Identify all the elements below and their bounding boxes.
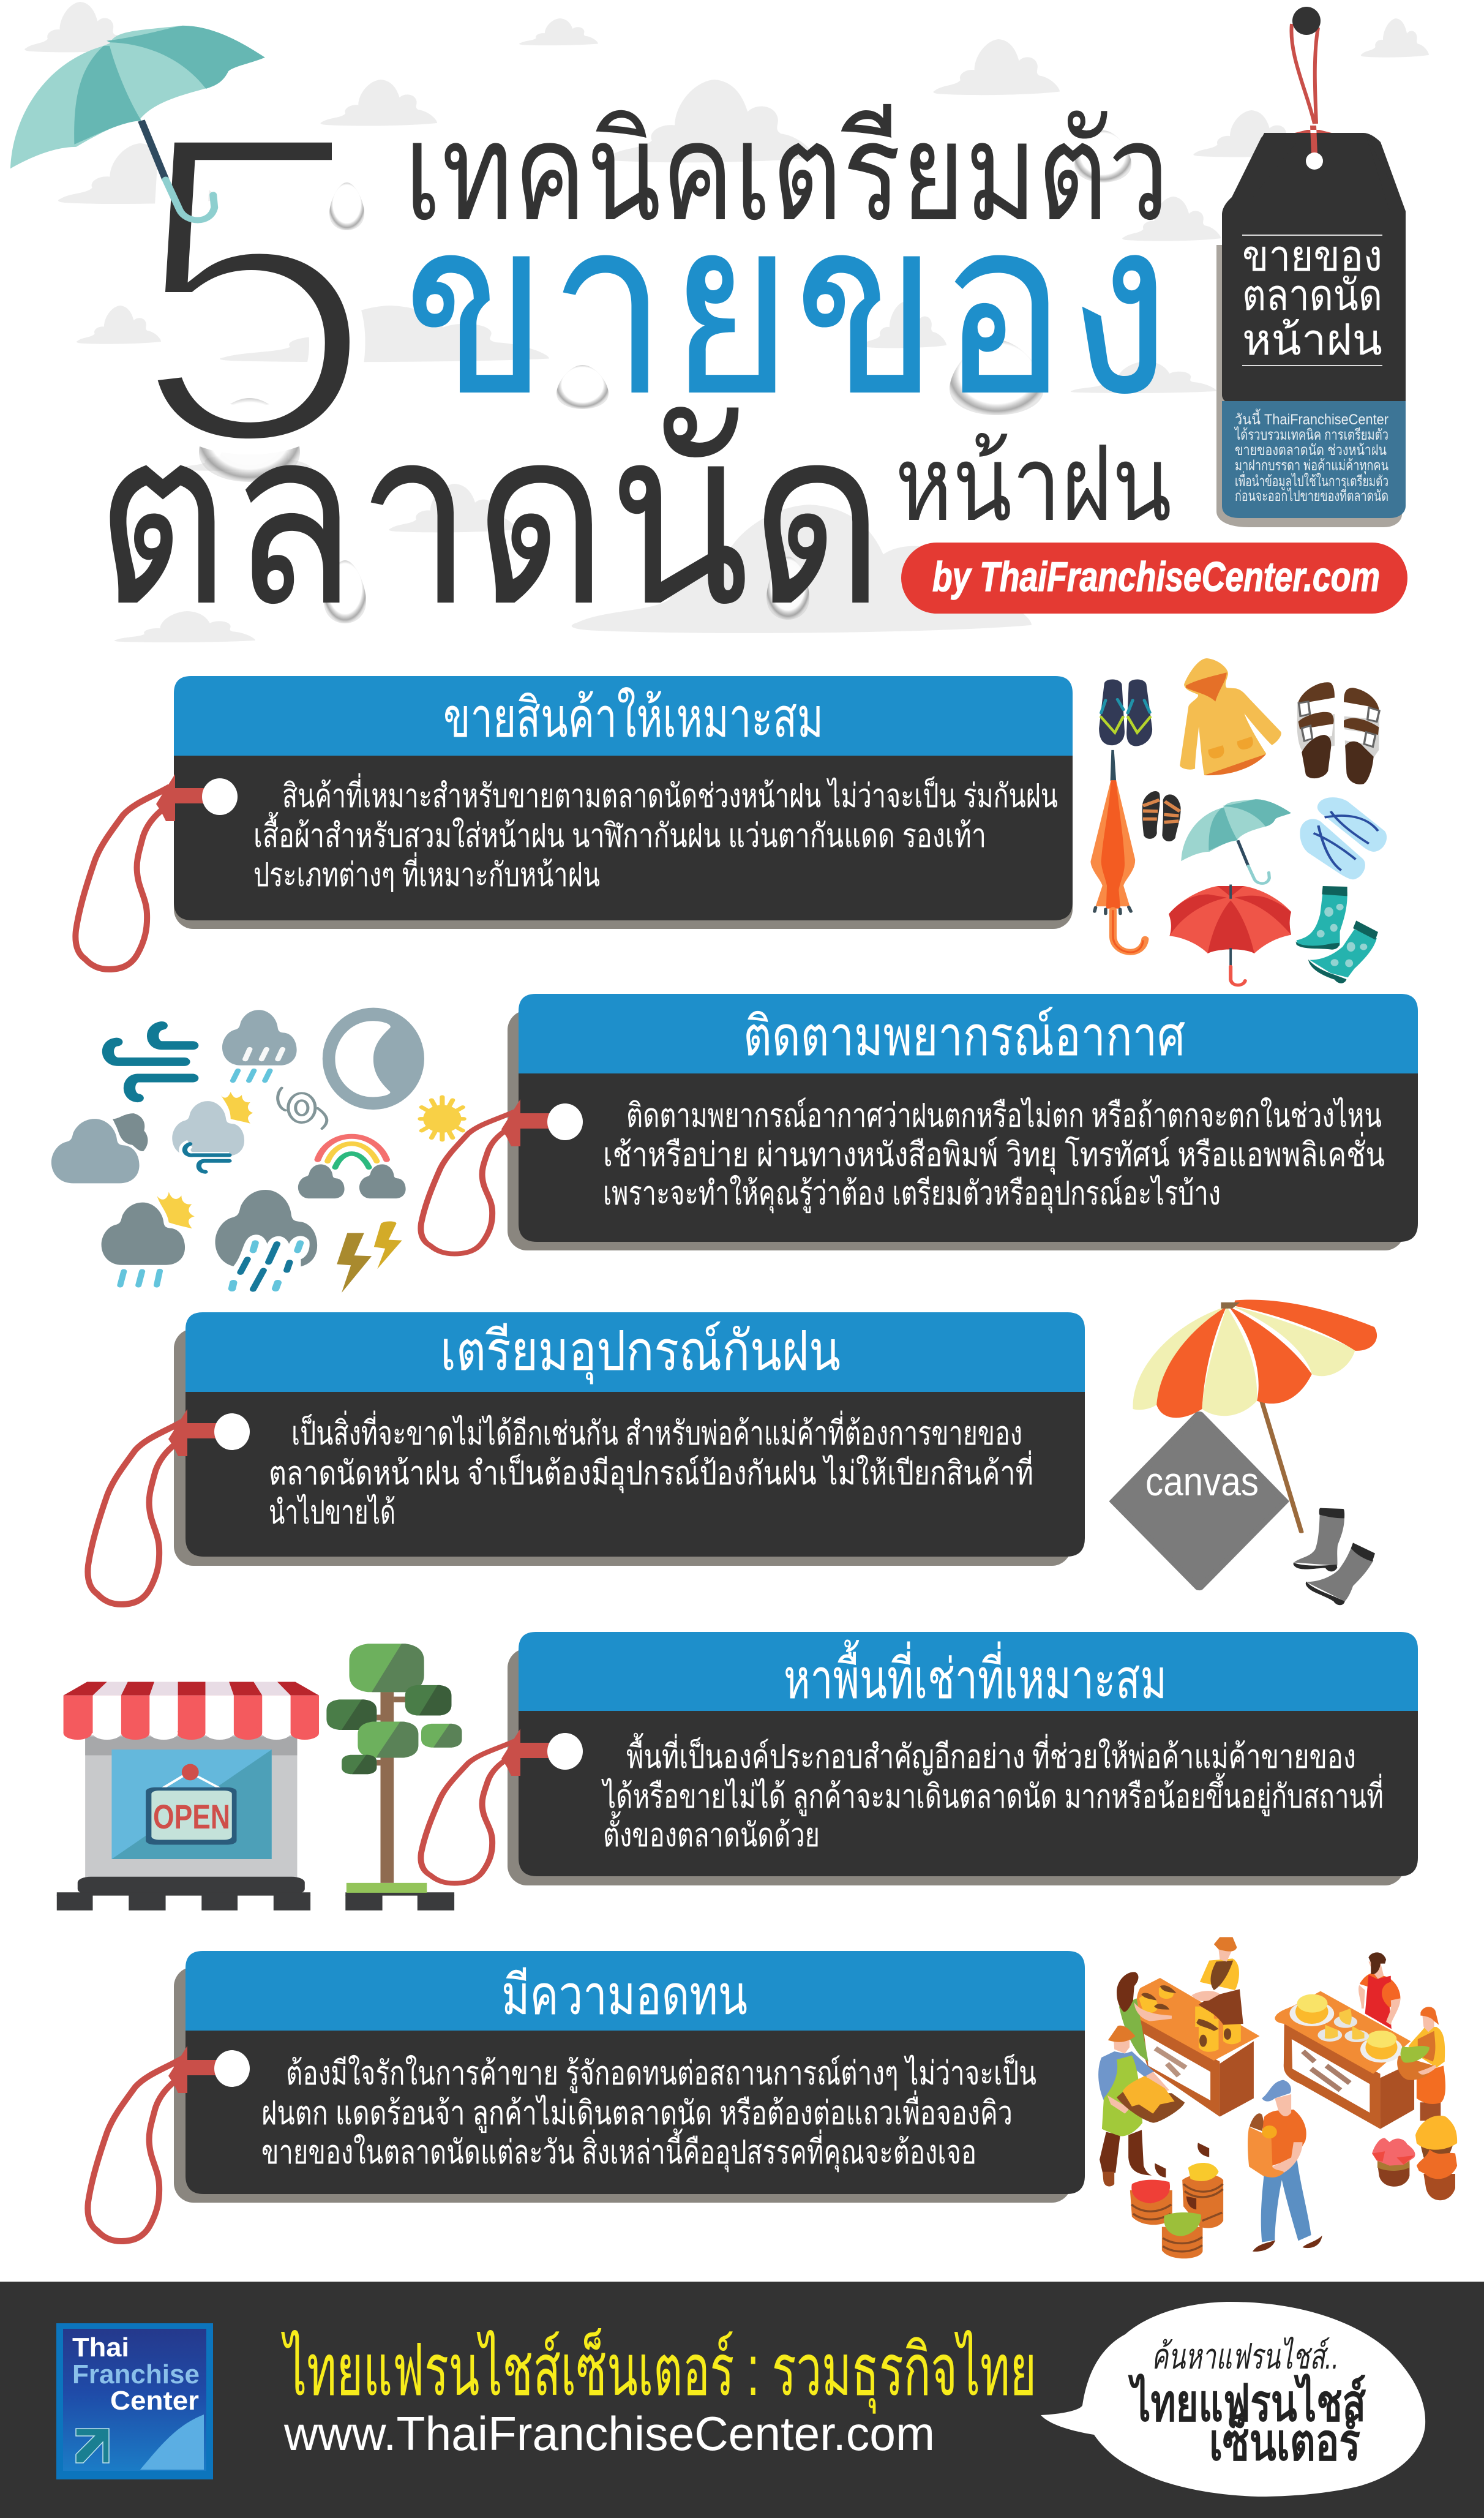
logo wing [140,2415,204,2470]
logo background [63,2329,206,2471]
card shadow [174,1967,1071,2203]
tag pin [1292,7,1321,35]
card text: ขายของในตลาดนัดแต่ละวัน สิ่งเหล่านี้คืออุปสรรคที่คุณจะต้องเจอ [261,2129,976,2173]
bubble shape [1041,2302,1425,2497]
icon: apple and pear barrels [1130,2143,1223,2258]
icon: yellow raincoat [1180,658,1281,775]
icon: striped awning [64,1682,319,1740]
icon: lightning [337,1221,402,1293]
icons: rainy season goods [1090,658,1387,985]
icon: wind [108,1026,193,1098]
tag loop [421,1729,583,1884]
icon: left stall [1136,1978,1259,2117]
icon: flower baskets [1372,2116,1457,2200]
card title: เตรียมอุปกรณ์กันฝน [440,1321,841,1385]
tag loop [75,774,238,969]
icon: man in red apron [1358,1952,1400,2029]
card text [603,1097,1385,1214]
open sign text: OPEN [153,1797,230,1836]
tag blue lower panel [1222,401,1406,518]
card text [261,2054,1036,2173]
icon: blue flip flops [1300,797,1387,879]
logo text [72,2332,200,2416]
icon: right stall [1275,1991,1414,2129]
red pill [901,543,1407,614]
card text: ประเภทต่างๆ ที่เหมาะกับหน้าฝน [253,852,600,893]
logo arrow [76,2429,109,2463]
footer headline: ไทยแฟรนไชส์เซ็นเตอร์ : รวมธุรกิจไทย [281,2328,1036,2415]
icons: weather [51,1008,464,1293]
illustration: market stalls and people [1098,1937,1457,2258]
tag text heading: หน้าฝน [1242,316,1382,364]
card body [186,1392,1085,1557]
icon: crescent moon [323,1008,424,1110]
number 5: 5 [130,37,376,537]
icon: canvas diamond [1113,1413,1285,1588]
panel: card 2 [421,994,1418,1254]
card title: หาพื้นที่เช่าที่เหมาะสม [784,1640,1167,1710]
card text: ฝนตก แดดร้อนจ้า ลูกค้าไม่เดินตลาดนัด หรือต้องต่อแถวเพื่อจองคิว [261,2090,1013,2133]
tag small paragraph [1234,408,1388,505]
speech bubble [1041,2302,1425,2497]
icon: sun behind rain cloud [102,1192,195,1285]
tag small paragraph: วันนี้ ThaiFranchiseCenter [1235,408,1388,428]
card text: สินค้าที่เหมาะสำหรับขายตามตลาดนัดช่วงหน้าฝน ไม่ว่าจะเป็น ร่มกันฝน [282,773,1058,814]
panel: card 3 [88,1312,1085,1604]
logo text: Center [110,2386,199,2416]
card text [601,1733,1384,1854]
icon: sun behind light cloud with wind [172,1092,253,1172]
card title: ติดตามพยากรณ์อากาศ [743,1006,1185,1067]
illustration: canvas, beach umbrella and boots [1113,1299,1377,1605]
icon: small black sandals [1142,791,1181,841]
title line 2: ขายของ [403,171,1171,445]
panel: card 5 [88,1951,1085,2241]
icon: brown sandals [1297,682,1379,784]
card header [174,676,1073,756]
bubble bold text [1128,2373,1366,2471]
icon: tree [326,1644,462,1893]
bubble bold text: เซ็นเตอร์ [1209,2411,1360,2471]
card header [519,994,1418,1073]
icon: storm cloud [215,1190,317,1290]
tag shadow [1216,245,1402,527]
icon: woman with basket [1397,2007,1445,2121]
icon: rainbow [298,1137,406,1198]
card shadow [174,735,1073,929]
icon: teal umbrella [1181,799,1291,884]
card body [519,1711,1418,1876]
card body [174,756,1073,920]
card shadow [508,1648,1404,1885]
tag text heading: ตลาดนัด [1242,271,1382,319]
card text: ต้องมีใจรักในการค้าขาย รู้จักอดทนต่อสถานการณ์ต่างๆ ไม่ว่าจะเป็น [286,2054,1036,2093]
card body [186,2031,1085,2194]
card header [186,1312,1085,1392]
logo text: Franchise [72,2359,200,2389]
icon: red umbrella [1169,884,1291,985]
title: main heading [95,97,1172,655]
icon: vendor with brown apron [1191,1937,1243,2025]
title line 4: หน้าฝน [895,426,1172,543]
card text: นำไปขายได้ [269,1494,395,1531]
tag text heading: ขายของ [1242,232,1382,280]
icon: navy flip flops [1099,680,1152,746]
byline badge [901,543,1407,614]
logo frame [56,2323,213,2479]
tag dark body [1222,133,1406,404]
panel: card 1 [75,676,1073,969]
tag small paragraph: มาฝากบรรดา พ่อค้าแม่ค้าทุกคน [1235,457,1388,475]
icon: open sign frame [146,1764,236,1845]
icon: grey boots [1294,1508,1375,1605]
icon: striped umbrella [1133,1299,1377,1532]
card text: เพราะจะทำให้คุณรู้ว่าต้อง เตรียมตัวหรืออุปกรณ์อะไรบ้าง [603,1174,1221,1214]
teal umbrella decoration [10,26,265,220]
title line 3: ตลาดนัด [95,381,885,655]
icon: vendor in green apron [1098,2026,1185,2187]
tag loop [421,1099,583,1254]
card text: ตลาดนัดหน้าฝน จำเป็นต้องมีอุปกรณ์ป้องกันฝน ไม่ให้เปียกสินค้าที่ [269,1450,1033,1494]
icon: sun [421,1097,464,1140]
tag small paragraph: ได้รวบรวมเทคนิค การเตรียมตัว [1234,426,1388,443]
tag small paragraph: เพื่อนำข้อมูลไปใช้ในการเตรียมตัว [1235,471,1388,490]
card shadow [174,1329,1071,1566]
logo text: Thai [72,2332,129,2362]
tag loop [88,1409,250,1604]
bubble small text: ค้นหาแฟรนไชส์.. [1152,2336,1339,2377]
footer band [0,2282,1484,2518]
icon: base blocks [57,1877,454,1911]
bubble bold text: ไทยแฟรนไชส์ [1128,2373,1366,2432]
title line 1: เทคนิคเตรียมตัว [404,97,1169,249]
card body [519,1073,1418,1242]
card title: ขายสินค้าให้เหมาะสม [443,688,823,749]
tag small paragraph: ขายของตลาดนัด ช่วงหน้าฝน [1235,442,1387,459]
tag text heading [1242,232,1382,364]
card header [519,1632,1418,1711]
background clouds [24,2,1429,642]
icon: teal rain boots [1295,886,1378,983]
card title: มีความอดทน [501,1965,748,2026]
hanging price tag [1216,7,1406,527]
card shadow [508,1010,1404,1250]
illustration: shop and tree [57,1644,462,1911]
tag small paragraph: ก่อนจะออกไปขายของที่ตลาดนัด [1235,486,1388,505]
icon: right stall cakes [1289,1994,1403,2062]
tag string [1291,24,1318,124]
card text: เสื้อผ้าสำหรับสวมใส่หน้าฝน นาฬิกากันฝน แว่นตากันแดด รองเท้า [253,812,986,854]
icon: woman shopper behind stall [1117,1972,1172,2062]
icon: cloud with dark cloud [51,1113,148,1183]
icon: closed orange umbrella [1090,750,1145,952]
canvas label: canvas [1145,1459,1259,1504]
icon: shopper with cap [1248,2080,1322,2252]
card text [253,773,1058,893]
icon: left stall goods [1139,1985,1241,2052]
footer url: www.ThaiFranchiseCenter.com [283,2407,935,2460]
card header [186,1951,1085,2031]
card text [269,1410,1033,1531]
card text: เป็นสิ่งที่จะขาดไม่ได้อีกเช่นกัน สำหรับพ่อค้าแม่ค้าที่ต้องการขายของ [291,1410,1022,1452]
icon: swirl [278,1088,327,1129]
water drops [199,130,1131,623]
footer logo [56,2323,213,2479]
tag loop [88,2046,250,2241]
tag hole [1306,152,1323,170]
icon: rain cloud [222,1010,297,1081]
panel: card 4 [421,1632,1418,1885]
icon: shop building [85,1735,297,1879]
card text: ตั้งของตลาดนัดด้วย [603,1811,820,1854]
